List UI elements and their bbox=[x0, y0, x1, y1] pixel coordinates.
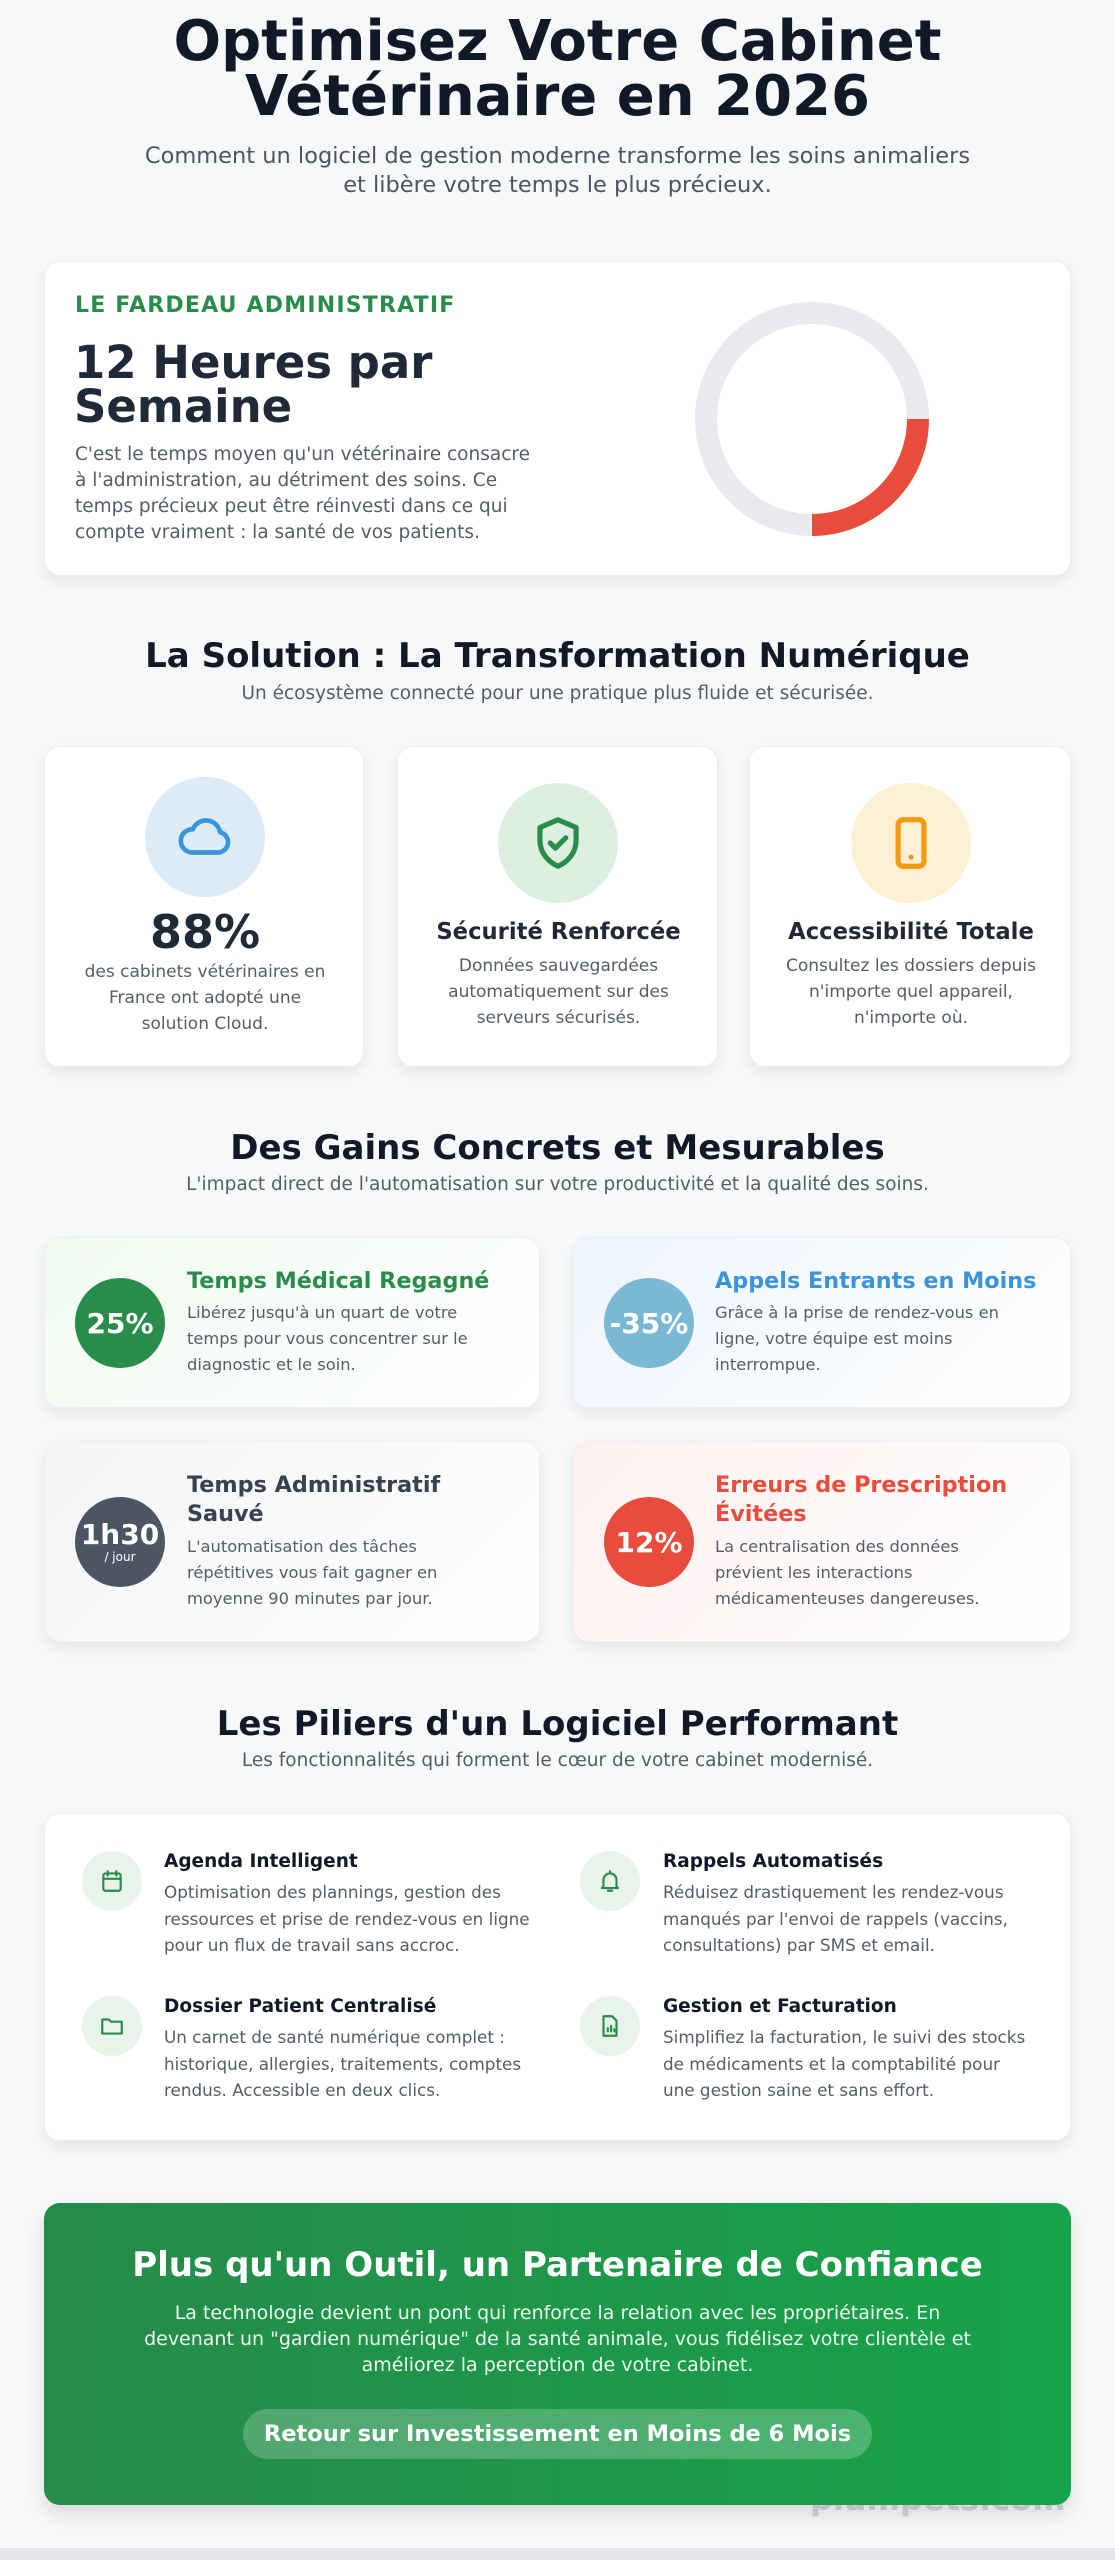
watermark: plumpets.com bbox=[810, 2480, 1065, 2518]
description: Simplifiez la facturation, le suivi des stocks de médicaments et la comptabilité pour une gestion saine et sans effort. bbox=[663, 2027, 1025, 2100]
subtitle: et libère votre temps le plus précieux. bbox=[343, 172, 772, 198]
heading: gains: Des Gains Concrets et Mesurables bbox=[230, 1128, 885, 1168]
panel: temps administratif bbox=[44, 1441, 540, 1642]
heading: solution: La Solution : La Transformation Numérique bbox=[145, 636, 970, 676]
feature: rappels bbox=[580, 1851, 1008, 1955]
title: Agenda Intelligent bbox=[164, 1851, 358, 1872]
subtitle bbox=[145, 143, 970, 198]
stat circle 12% bbox=[604, 1497, 694, 1587]
panel: features bbox=[44, 1813, 1071, 2141]
subheading: Un écosystème connecté pour une pratique plus fluide et sécurisée. bbox=[241, 683, 874, 704]
feature: agenda bbox=[82, 1851, 530, 1955]
stat circle 1h30 bbox=[75, 1497, 165, 1587]
title: Optimisez Votre Cabinet bbox=[173, 9, 942, 74]
description: Données sauvegardées automatiquement sur des serveurs sécurisés. bbox=[448, 956, 669, 1028]
feature: facturation bbox=[580, 1996, 1025, 2100]
title: Dossier Patient Centralisé bbox=[164, 1996, 436, 2017]
panel: temps médical bbox=[44, 1237, 540, 1408]
stat circle 25% bbox=[75, 1278, 165, 1368]
description: Optimisation des plannings, gestion des ressources et prise de rendez-vous en ligne pour un flux de travail sans accroc. bbox=[164, 1882, 530, 1955]
donut chart bbox=[695, 302, 929, 536]
heading: piliers: Les Piliers d'un Logiciel Performant bbox=[217, 1704, 898, 1744]
heading: 12 heures: Semaine bbox=[74, 380, 292, 433]
text block: C'est le temps moyen qu'un vétérinaire consacre à l'administration, au détriment des soins. Ce temps précieux peut être réinvesti dans ce qui compte vraiment : la santé de vos patients. bbox=[75, 444, 530, 543]
stat 88%: 88% bbox=[150, 905, 260, 959]
panel: appels bbox=[573, 1237, 1071, 1408]
description: L'automatisation des tâches répétitives vous fait gagner en moyenne 90 minutes par jour. bbox=[187, 1537, 437, 1608]
description: Libérez jusqu'à un quart de votre temps pour vous concentrer sur le diagnostic et le soin. bbox=[187, 1303, 468, 1374]
stat circle 12%: 12% bbox=[615, 1526, 683, 1558]
panel: accessibility bbox=[749, 746, 1071, 1067]
panel: administrative burden bbox=[44, 261, 1071, 576]
icon: bell bbox=[580, 1851, 640, 1911]
subheading: L'impact direct de l'automatisation sur votre productivité et la qualité des soins. bbox=[186, 1174, 929, 1195]
icon: shield bbox=[498, 783, 618, 903]
title: Appels Entrants en Moins bbox=[715, 1268, 1036, 1294]
panel: erreurs bbox=[573, 1441, 1071, 1642]
paragraph: La technologie devient un pont qui renforce la relation avec les propriétaires. En devenant un "gardien numérique" de la santé animale, vous fidélisez votre clientèle et améliorez la perception de votre cabinet. bbox=[144, 2302, 971, 2376]
description: des cabinets vétérinaires en France ont adopté une solution Cloud. bbox=[85, 962, 325, 1034]
stat circle -35%: -35% bbox=[610, 1306, 688, 1340]
title: Gestion et Facturation bbox=[663, 1996, 897, 2017]
panel: call to action bbox=[44, 2203, 1071, 2505]
button: ROI bbox=[243, 2409, 872, 2459]
description: La centralisation des données prévient les interactions médicamenteuses dangereuses. bbox=[715, 1537, 980, 1608]
title: Rappels Automatisés bbox=[663, 1851, 883, 1872]
description: Un carnet de santé numérique complet : historique, allergies, traitements, comptes rendus. Accessible en deux clics. bbox=[164, 2027, 521, 2100]
icon: invoice chart bbox=[580, 1996, 640, 2056]
description: Grâce à la prise de rendez-vous en ligne, votre équipe est moins interrompue. bbox=[715, 1303, 999, 1374]
icon: phone bbox=[851, 783, 971, 903]
stat circle 25%: 25% bbox=[86, 1306, 154, 1340]
panel: cloud bbox=[44, 746, 364, 1067]
title: Temps Administratif Sauvé bbox=[187, 1472, 440, 1527]
subheading: Les fonctionnalités qui forment le cœur de votre cabinet modernisé. bbox=[242, 1750, 873, 1771]
description: Consultez les dossiers depuis n'importe quel appareil, n'importe où. bbox=[786, 956, 1036, 1028]
stat circle 1h30: / jour bbox=[104, 1550, 136, 1564]
title: Temps Médical Regagné bbox=[187, 1268, 489, 1294]
feature: dossier bbox=[82, 1996, 521, 2100]
title: Accessibilité Totale bbox=[788, 919, 1034, 945]
label: LE FARDEAU ADMINISTRATIF bbox=[75, 293, 455, 318]
icon: cloud bbox=[145, 777, 265, 897]
title: Sécurité Renforcée bbox=[436, 919, 681, 945]
button: ROI: Retour sur Investissement en Moins de 6 Mois bbox=[264, 2421, 851, 2447]
heading: 12 heures bbox=[74, 336, 432, 433]
panel: security bbox=[397, 746, 718, 1067]
heading: Plus qu'un Outil, un Partenaire de Confiance bbox=[132, 2245, 983, 2285]
heading: 12 heures: 12 Heures par bbox=[74, 336, 432, 389]
icon: folder bbox=[82, 1996, 142, 2056]
description: Réduisez drastiquement les rendez-vous manqués par l'envoi de rappels (vaccins, consultations) par SMS et email. bbox=[663, 1882, 1008, 1955]
stat circle -35% bbox=[604, 1278, 694, 1368]
title bbox=[173, 9, 942, 129]
subtitle: Comment un logiciel de gestion moderne transforme les soins animaliers bbox=[145, 143, 970, 169]
title: Vétérinaire en 2026 bbox=[245, 64, 870, 129]
title: Erreurs de Prescription Évitées bbox=[715, 1472, 1007, 1527]
icon: calendar bbox=[82, 1851, 142, 1911]
stat circle 1h30: 1h30 bbox=[81, 1518, 159, 1551]
